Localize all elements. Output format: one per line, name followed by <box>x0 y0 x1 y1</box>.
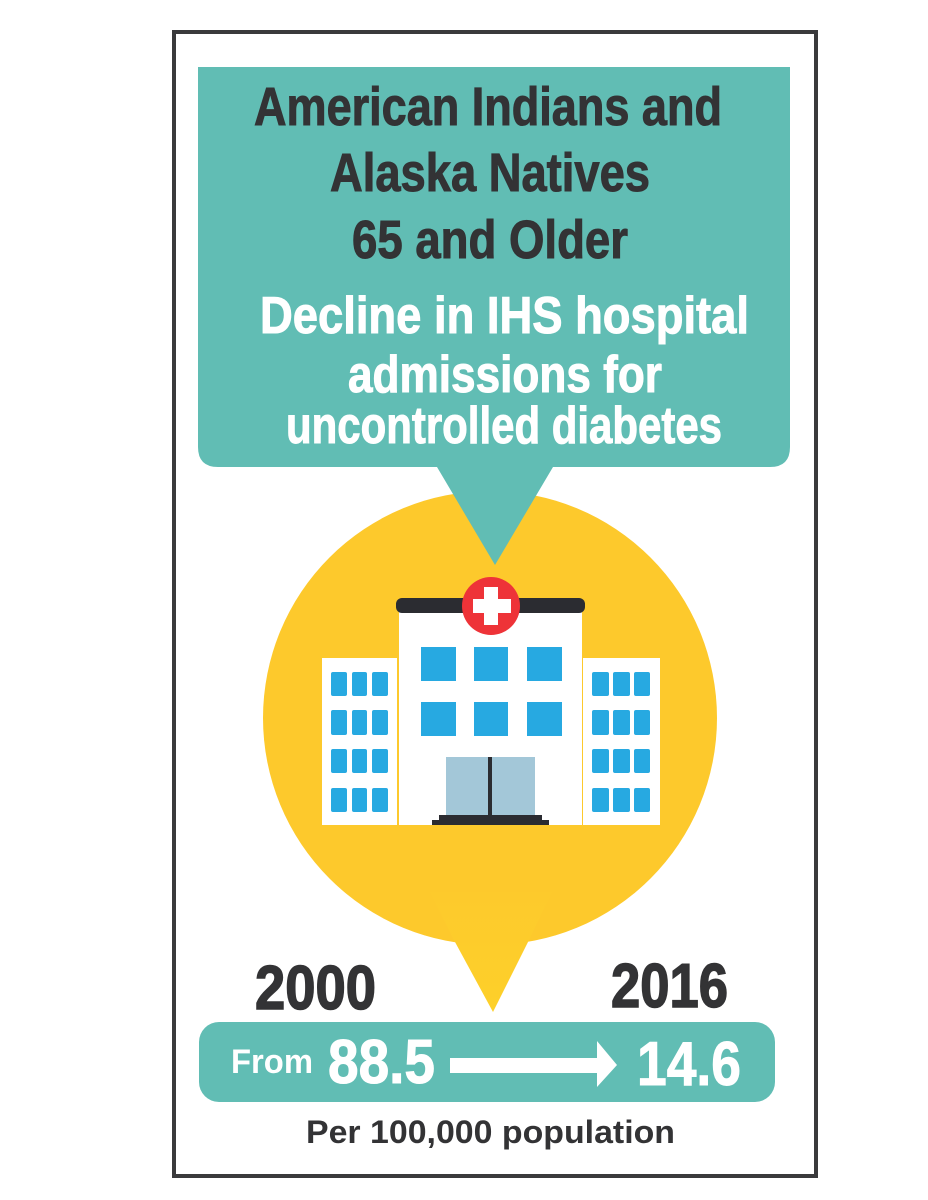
from label: From <box>231 1043 313 1081</box>
roof <box>396 598 585 613</box>
panel: values pill <box>199 1022 775 1102</box>
subtitle: admissions for <box>348 346 662 404</box>
subtitle <box>260 287 749 455</box>
subtitle: uncontrolled diabetes <box>286 397 722 455</box>
title: Alaska Natives <box>330 143 650 203</box>
teal speech bubble heading panel <box>198 67 790 565</box>
footnote: Per 100,000 population <box>306 1114 675 1150</box>
right wing <box>583 658 660 825</box>
subtitle: Decline in IHS hospital <box>260 287 749 345</box>
value: 14.6: 14.6 <box>637 1030 741 1099</box>
main block <box>399 610 582 825</box>
panel: outer border <box>174 32 816 1176</box>
left wing <box>322 658 397 825</box>
door <box>432 757 549 825</box>
icon: hospital building <box>322 577 660 825</box>
title: 65 and Older <box>352 210 628 270</box>
value: 88.5: 88.5 <box>328 1028 435 1097</box>
arrow <box>450 1041 617 1087</box>
title <box>254 77 722 270</box>
icon: red cross badge <box>462 577 520 635</box>
label: 2016: 2016 <box>611 952 728 1021</box>
yellow circle speech bubble <box>263 491 717 1012</box>
label: 2000: 2000 <box>255 954 376 1023</box>
title: American Indians and <box>254 77 722 137</box>
